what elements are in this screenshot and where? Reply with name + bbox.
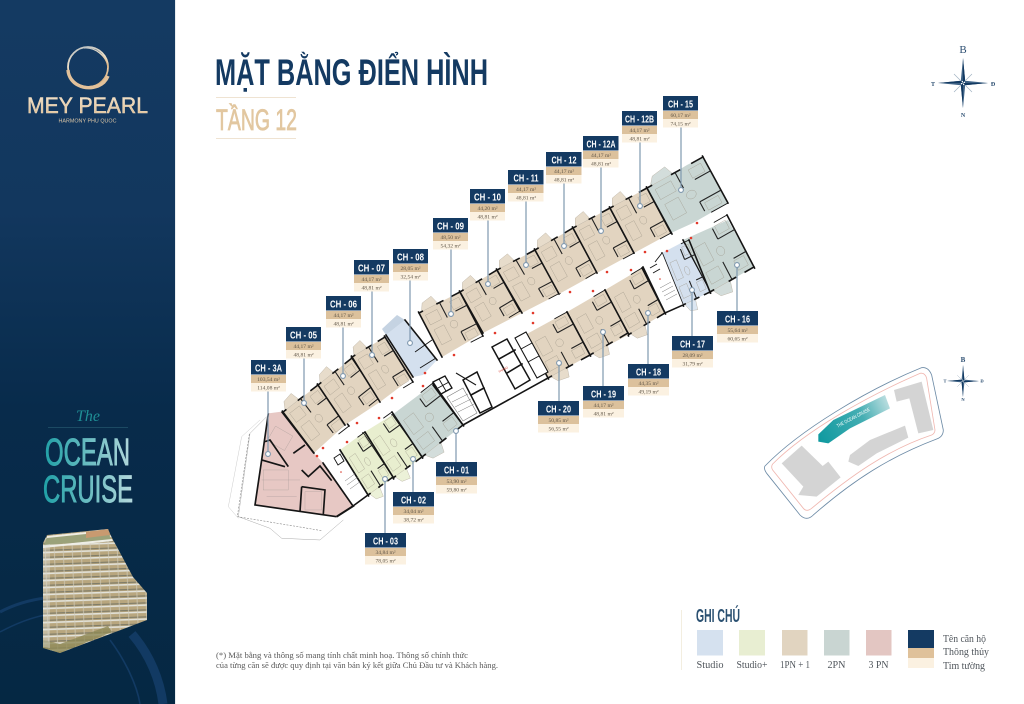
- terrace outline: [228, 417, 343, 540]
- callout CH-3A: CH - 3A: [255, 362, 282, 374]
- ocean: OCEAN: [45, 432, 130, 474]
- the: The: [76, 408, 100, 425]
- unit CH-18: [605, 268, 669, 344]
- callout CH-12A: [583, 136, 618, 233]
- legend: 3 PN: 3 PN: [868, 660, 889, 671]
- callout CH-19: 44,17 m²: [593, 403, 614, 409]
- callout CH-12A: 44,17 m²: [591, 153, 611, 159]
- compass: site map: [943, 356, 984, 402]
- callout CH-17: 31,79 m²: [682, 362, 703, 368]
- footnote: của từng căn sẽ được quy định tại văn bản ký kết giữa Chủ Đầu tư và Khách hàng.: [216, 660, 498, 670]
- unit CH-12: [530, 220, 597, 294]
- legend heading: GHI CHÚ: [696, 605, 740, 626]
- compass: site map: T: [943, 378, 947, 384]
- callout CH-15: 60,17 m²: [670, 113, 691, 119]
- unit CH-3A: [255, 412, 353, 517]
- callout CH-01: [436, 429, 477, 494]
- callout CH-16: [717, 263, 758, 342]
- unit CH-19: [567, 290, 632, 363]
- callout CH-17: CH - 17: [680, 338, 705, 350]
- callout CH-17: 28,09 m²: [682, 353, 703, 359]
- unit CH-01: [392, 383, 469, 465]
- callout CH-05: 44,17 m²: [293, 344, 314, 350]
- callout CH-18: CH - 18: [636, 366, 661, 378]
- callout CH-12A: 48,81 m²: [591, 162, 611, 168]
- compass: top: B: [959, 44, 967, 56]
- callout CH-03: 78,05 m²: [375, 558, 396, 564]
- legend: [681, 605, 990, 672]
- callout CH-16: 55,64 m²: [727, 328, 748, 334]
- subtitle: floor 12: TẦNG 12: [216, 103, 297, 137]
- callout CH-12B: 44,17 m²: [629, 128, 650, 134]
- compass: top: [931, 44, 996, 119]
- project name: [43, 408, 133, 511]
- callout CH-07: [354, 260, 389, 357]
- callout CH-18: [628, 311, 669, 396]
- callout CH-16: CH - 16: [725, 314, 750, 326]
- callout CH-15: 74,15 m²: [670, 122, 691, 128]
- unit CH-12A: [568, 199, 634, 273]
- unit CH-06: [313, 350, 380, 425]
- unit CH-11: [492, 242, 560, 313]
- legend: Studio: Studio: [696, 660, 724, 671]
- corridor and cores: [313, 223, 710, 506]
- unit CH-07: [347, 328, 413, 402]
- callout CH-01: 53,90 m²: [446, 479, 467, 485]
- callout CH-18: 44,35 m²: [638, 381, 659, 387]
- callout CH-12: CH - 12: [552, 154, 577, 166]
- sidebar panel: [0, 0, 176, 704]
- callout CH-11: CH - 11: [514, 172, 539, 184]
- floor plan: [228, 148, 759, 540]
- legend: 2PN: 2PN: [828, 660, 846, 671]
- logo tagline: HARMONY PHU QUOC: [58, 118, 117, 124]
- callout CH-06: 44,17 m²: [333, 313, 354, 319]
- callout CH-3A: 103,54 m²: [257, 377, 280, 383]
- compass: top: T: [931, 82, 935, 88]
- callout CH-12: 48,81 m²: [554, 178, 574, 184]
- highlighted building: The Ocean Cruise: [818, 395, 890, 443]
- legend: 3 PN: [866, 630, 892, 671]
- callout CH-10: CH - 10: [474, 192, 501, 204]
- callout CH-20: 50,85 m²: [548, 418, 569, 424]
- left core: [323, 450, 368, 506]
- setback line: [772, 373, 935, 510]
- callout CH-02: [393, 457, 434, 524]
- callout CH-08: 32,54 m²: [400, 274, 421, 280]
- callout CH-06: 48,81 m²: [333, 322, 354, 328]
- background wave arcs: [0, 598, 163, 704]
- callout CH-03: [365, 477, 406, 564]
- callout CH-11: [508, 170, 544, 267]
- callout CH-08: CH - 08: [397, 252, 424, 264]
- callout CH-20: CH - 20: [546, 404, 571, 416]
- callout CH-12B: CH - 12B: [625, 114, 654, 126]
- building illustration: [43, 529, 147, 653]
- callout CH-05: CH - 05: [290, 330, 317, 342]
- callout CH-10: 48,81 m²: [477, 214, 498, 220]
- callout CH-19: 48,81 m²: [593, 412, 614, 418]
- unit CH-12B: [605, 179, 671, 253]
- callout CH-10: [470, 189, 505, 286]
- unit CH-15: [642, 148, 728, 234]
- callout CH-15: [663, 96, 698, 192]
- callout CH-17: [672, 288, 713, 368]
- callout CH-11: 44,17 m²: [516, 187, 536, 193]
- callout CH-03: CH - 03: [373, 536, 398, 548]
- callout CH-20: [538, 361, 579, 432]
- callout CH-09: 54,32 m²: [440, 244, 461, 250]
- fire exit markers: [316, 222, 698, 457]
- callout CH-03: 34,84 m²: [375, 550, 396, 556]
- callout CH-07: CH - 07: [358, 262, 385, 274]
- compass: site map: B: [961, 356, 966, 364]
- callout CH-02: 38,72 m²: [403, 518, 424, 524]
- callout CH-06: CH - 06: [330, 298, 357, 310]
- callout CH-01: 59,80 m²: [446, 488, 467, 494]
- site map: [764, 368, 943, 518]
- legend: label stack: [908, 630, 990, 672]
- footnote: (*) Mặt bằng và thông số mang tính chất minh hoạ. Thông số chính thức: [216, 650, 468, 660]
- legend: label stack: Tên căn hộ: [943, 634, 986, 645]
- unit CH-05: [277, 377, 349, 453]
- central core: THANG: [498, 365, 509, 374]
- callout CH-3A: 114,08 m²: [257, 386, 280, 392]
- callout CH-18: 49,19 m²: [638, 390, 659, 396]
- callout CH-09: [433, 218, 468, 316]
- neighbouring buildings: [782, 382, 933, 497]
- callout CH-19: [583, 330, 624, 418]
- central core: [433, 332, 548, 425]
- callout CH-09: 48,50 m²: [440, 235, 461, 241]
- callout CH-19: CH - 19: [591, 388, 616, 400]
- callout CH-12: [546, 152, 582, 248]
- callout CH-09: CH - 09: [437, 220, 464, 232]
- cruise: CRUISE: [43, 469, 133, 511]
- callout CH-20: 56,55 m²: [548, 426, 569, 432]
- callout CH-06: [326, 296, 361, 378]
- compass: site map: N: [961, 397, 965, 402]
- callout CH-05: [286, 327, 321, 405]
- right core: [643, 253, 683, 313]
- callout CH-02: CH - 02: [401, 494, 426, 506]
- callout CH-15: CH - 15: [668, 98, 693, 110]
- compass: top: Đ: [991, 82, 996, 88]
- logo ring: [68, 47, 108, 88]
- callout CH-16: 60,65 m²: [727, 336, 748, 342]
- callout CH-3A: [251, 360, 286, 456]
- unit CH-10: [456, 262, 522, 333]
- legend: Studio: [696, 630, 724, 671]
- unit CH-16: [683, 215, 759, 302]
- callout CH-02: 34,04 m²: [403, 509, 424, 515]
- legend: label stack: Tim tường: [943, 661, 986, 672]
- logo: Mey Pearl: [27, 47, 148, 124]
- unit CH-17: [662, 240, 714, 315]
- unit CH-09: [415, 284, 483, 357]
- unit CH-02: [363, 412, 428, 487]
- callout CH-07: 48,81 m²: [361, 286, 382, 292]
- callout CH-12B: [622, 111, 657, 208]
- callout CH-12B: 48,81 m²: [629, 136, 650, 142]
- callout CH-10: 44,20 m²: [477, 206, 498, 212]
- callout CH-08: [393, 249, 428, 345]
- compass: site map: Đ: [980, 378, 984, 384]
- legend: 1PN + 1: [780, 630, 810, 671]
- legend: Studio+: [736, 630, 768, 671]
- subtitle: floor 12: [216, 97, 297, 139]
- callout CH-01: CH - 01: [444, 464, 469, 476]
- legend: label stack: Thông thủy: [943, 647, 990, 658]
- legend: 1PN + 1: 1PN + 1: [780, 660, 810, 671]
- building label: THE OCEAN CRUISE: [836, 407, 872, 430]
- callout CH-12: 44,17 m²: [554, 169, 574, 175]
- compass: top: N: [961, 113, 966, 119]
- title: MẶT BẰNG ĐIỂN HÌNH: [215, 51, 488, 93]
- callout CH-12A: CH - 12A: [586, 138, 616, 150]
- callout CH-08: 28,05 m²: [400, 266, 421, 272]
- legend: 2PN: [824, 630, 850, 671]
- unit CH-20: [525, 312, 594, 386]
- footnote: [216, 650, 498, 670]
- callout CH-05: 48,81 m²: [293, 352, 314, 358]
- callout CH-11: 48,81 m²: [516, 196, 536, 202]
- unit CH-08: [382, 315, 437, 377]
- unit CH-03: [340, 432, 398, 504]
- logo wordmark: MEY PEARL: [27, 93, 148, 118]
- site boundary: [764, 368, 943, 518]
- callout CH-07: 44,17 m²: [361, 277, 382, 283]
- legend: Studio+: Studio+: [736, 660, 768, 671]
